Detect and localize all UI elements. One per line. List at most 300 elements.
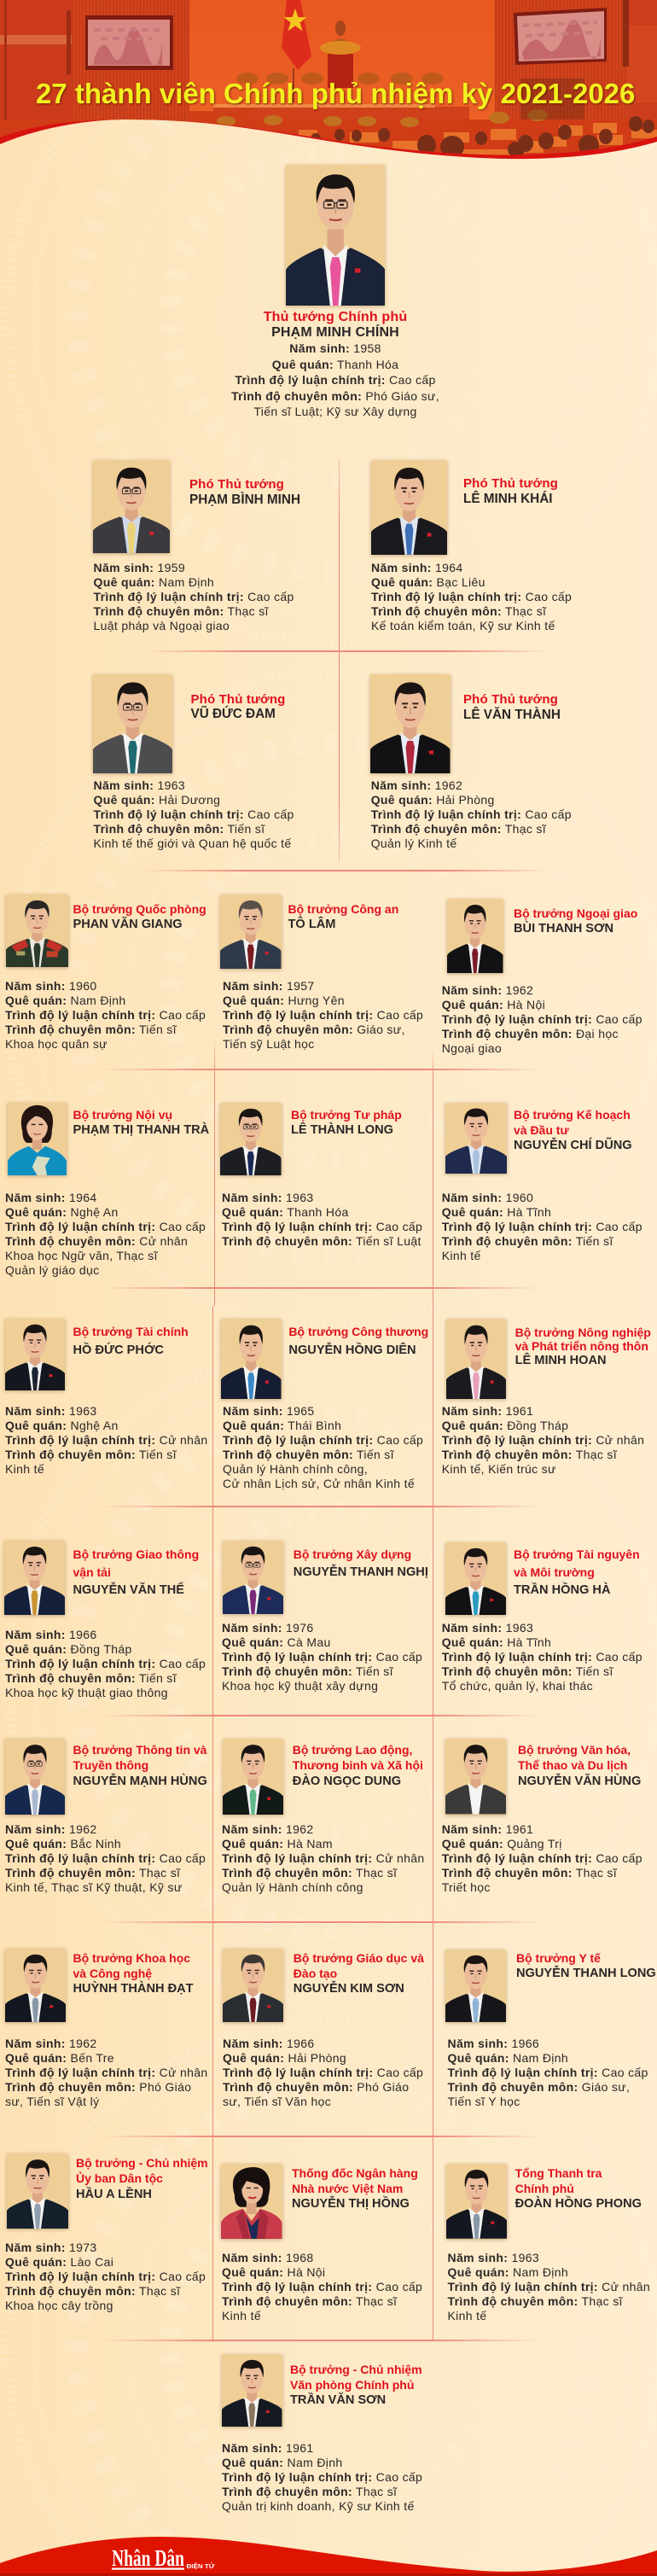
role and name: Bộ trưởng Kế hoạch — [514, 1108, 631, 1122]
role and name: NGUYỄN MẠNH HÙNG — [73, 1775, 207, 1788]
portrait: Hồ Đức Phớc — [5, 1319, 65, 1390]
role and name — [189, 477, 300, 507]
panel: Bộ trưởng Thông tin và Truyền thông Nguyễn Mạnh Hùng — [5, 1739, 212, 1897]
panel: Bộ trưởng - Chủ nhiệm Văn phòng Chính phủ Trần Văn Sơn — [222, 2354, 431, 2516]
role and name: Tổng Thanh tra — [515, 2166, 602, 2180]
role and name — [73, 1742, 207, 1789]
panel: Bộ trưởng Công an Tô Lâm — [218, 893, 423, 1051]
role and name: Bộ trưởng Xây dựng — [294, 1547, 411, 1561]
biography — [222, 1621, 422, 1693]
biography: Năm sinh: 1963 — [222, 1191, 313, 1204]
role and name — [518, 1742, 641, 1789]
panel: Bộ trưởng Quốc phòng Phan Văn Giang — [3, 893, 206, 1051]
biography: Trình độ lý luận chính trị: Cao cấp — [442, 1650, 642, 1664]
biography: Quê quán: Nghệ An — [5, 1419, 119, 1432]
role and name: Truyền thông — [73, 1758, 148, 1772]
biography: Trình độ chuyên môn: Tiến sĩ — [223, 1448, 394, 1461]
role and name: Bộ trưởng - Chủ nhiệm — [290, 2363, 422, 2376]
role and name: ĐÀO NGỌC DUNG — [293, 1775, 401, 1788]
role and name: Bộ trưởng - Chủ nhiệm — [76, 2156, 208, 2170]
biography: Trình độ lý luận chính trị: Cử nhân — [447, 2280, 650, 2293]
biography: Triết học — [442, 1880, 491, 1894]
biography: Trình độ lý luận chính trị: Cao cấp — [94, 807, 294, 821]
portrait: Hầu A Lềnh — [7, 2153, 68, 2229]
biography: Năm sinh: 1963 — [5, 1404, 96, 1418]
role and name: LÊ MINH HOAN — [515, 1354, 607, 1367]
biography: Trình độ chuyên môn: Tiến sĩ — [442, 1234, 613, 1248]
biography — [442, 983, 642, 1055]
role and name — [73, 1325, 189, 1357]
portrait: Nguyễn Văn Hùng — [445, 1739, 506, 1815]
biography: Năm sinh: 1958 — [289, 341, 381, 355]
biography: Trình độ lý luận chính trị: Cao cấp — [222, 2280, 422, 2293]
role and name — [73, 902, 206, 931]
title: 27 thành viên Chính phủ nhiệm kỳ 2021-2026 — [36, 78, 635, 109]
role and name: Bộ trưởng Tài chính — [73, 1325, 189, 1338]
role and name — [514, 1108, 632, 1152]
panel: Phó Thủ tướng Lê Minh Khái — [369, 459, 572, 632]
biography: Khoa học Ngữ văn, Thạc sĩ — [5, 1249, 158, 1262]
biography: Quê quán: Hưng Yên — [223, 994, 345, 1007]
biography: Trình độ chuyên môn: Đại học — [442, 1027, 619, 1040]
role and name — [294, 1950, 424, 1996]
panel: Bộ trưởng Lao động, Thương binh và Xã hội Đào Ngọc Dung — [222, 1739, 431, 1897]
biography: Kinh tế — [5, 1462, 44, 1476]
biography — [5, 979, 206, 1051]
biography: Khoa học quân sự — [5, 1037, 108, 1051]
biography — [222, 2251, 422, 2323]
role and name: vận tải — [73, 1565, 111, 1579]
biography: Quê quán: Nam Định — [5, 994, 125, 1007]
biography — [442, 1191, 642, 1262]
role and name: Văn phòng Chính phủ — [290, 2378, 414, 2392]
panel: Bộ trưởng Xây dựng Nguyễn Thanh Nghị — [222, 1541, 431, 1694]
biography: Trình độ chuyên môn: Thạc sĩ — [442, 1866, 617, 1880]
biography: Năm sinh: 1964 — [371, 560, 462, 574]
portrait: Nguyễn Thanh Long — [445, 1949, 506, 2022]
portrait: Bùi Thanh Sơn — [447, 899, 503, 973]
biography: Quản lý Hành chính công, — [223, 1462, 368, 1476]
role and name: HẦU A LỀNH — [76, 2188, 152, 2201]
biography: Quê quán: Đồng Tháp — [5, 1642, 132, 1656]
biography: Trình độ chuyên môn: Thạc sĩ — [222, 2485, 397, 2498]
role and name: TRẦN VĂN SƠN — [290, 2393, 386, 2407]
biography: Luật pháp và Ngoại giao — [94, 618, 230, 632]
role and name: Bộ trưởng Tài nguyên — [514, 1547, 640, 1561]
biography: Năm sinh: 1962 — [371, 778, 462, 792]
role and name — [288, 1325, 428, 1357]
biography: Trình độ chuyên môn: Tiến sĩ — [222, 1664, 393, 1678]
biography: Khoa học kỹ thuật giao thông — [5, 1685, 168, 1699]
role and name: ĐOÀN HỒNG PHONG — [515, 2197, 642, 2211]
role and name: HỒ ĐỨC PHỚC — [73, 1343, 164, 1357]
biography: Năm sinh: 1973 — [5, 2241, 96, 2254]
role and name: NGUYỄN CHÍ DŨNG — [514, 1139, 632, 1152]
biography: Năm sinh: 1966 — [447, 2037, 539, 2050]
biography: Trình độ lý luận chính trị: Cao cấp — [223, 2066, 423, 2079]
portrait: Lê Văn Thành — [370, 674, 451, 773]
role and name: HUỲNH THÀNH ĐẠT — [73, 1982, 194, 1996]
portrait: Trần Hồng Hà — [445, 1542, 506, 1615]
biography: Trình độ chuyên môn: Phó Giáo sư, — [231, 389, 439, 403]
biography: Tổ chức, quản lý, khai thác — [442, 1679, 593, 1693]
biography: Trình độ lý luận chính trị: Cao cấp — [94, 589, 294, 603]
panel: Bộ trưởng - Chủ nhiệm Ủy ban Dân tộc Hầu A Lềnh — [5, 2153, 212, 2316]
biography: Trình độ lý luận chính trị: Cao cấp — [5, 1220, 206, 1233]
biography: Trình độ lý luận chính trị: Cao cấp — [442, 1012, 642, 1026]
role and name: TÔ LÂM — [288, 918, 335, 931]
header: National Assembly hall banner — [0, 0, 657, 159]
biography: Trình độ lý luận chính trị: Cử nhân — [222, 1851, 425, 1865]
biography: Năm sinh: 1964 — [5, 1191, 96, 1204]
biography: Trình độ lý luận chính trị: Cao cấp — [5, 1851, 206, 1865]
role and name: LÊ THÀNH LONG — [291, 1123, 393, 1137]
biography: Trình độ chuyên môn: Phó Giáo — [5, 2080, 191, 2094]
biography: Quê quán: Bến Tre — [5, 2051, 114, 2065]
biography: Quê quán: Quảng Trị — [442, 1837, 562, 1850]
role and name: và Đầu tư — [514, 1123, 569, 1137]
biography: sư, Tiến sĩ Văn học — [223, 2095, 331, 2108]
biography — [222, 1822, 425, 1895]
biography — [222, 2441, 422, 2514]
biography: Trình độ lý luận chính trị: Cao cấp — [222, 1650, 422, 1664]
biography: Khoa học cây trồng — [5, 2299, 113, 2312]
biography: sư, Tiến sĩ Vật lý — [5, 2095, 99, 2108]
role and name: Bộ trưởng Tư pháp — [291, 1108, 402, 1122]
role and name — [293, 1742, 423, 1789]
biography: Trình độ chuyên môn: Tiến sĩ Luật — [222, 1234, 422, 1248]
panel: Bộ trưởng Nông nghiệp và Phát triển nông thôn Lê Minh Hoan — [442, 1318, 651, 1476]
role and name: Bộ trưởng Nông nghiệp — [515, 1326, 651, 1339]
biography: Năm sinh: 1963 — [447, 2251, 539, 2264]
biography: Tiến sỹ Luật học — [223, 1037, 315, 1051]
biography: Trình độ lý luận chính trị: Cao cấp — [371, 589, 572, 603]
role and name — [263, 310, 407, 340]
biography: Trình độ lý luận chính trị: Cao cấp — [5, 1656, 206, 1670]
biography: Trình độ lý luận chính trị: Cao cấp — [223, 1433, 423, 1447]
biography: Trình độ chuyên môn: Thạc sĩ — [371, 821, 546, 835]
panel: Bộ trưởng Nội vụ Phạm Thị Thanh Trà — [5, 1101, 209, 1277]
portrait: Phạm Thị Thanh Trà — [8, 1103, 67, 1175]
biography: Kinh tế thế giới và Quan hệ quốc tế — [94, 836, 292, 850]
role and name: PHẠM MINH CHÍNH — [271, 325, 399, 340]
biography: Quê quán: Cà Mau — [222, 1635, 331, 1649]
role and name: Bộ trưởng Công an — [288, 902, 398, 916]
biography — [231, 341, 439, 418]
biography: Năm sinh: 1962 — [222, 1822, 313, 1836]
role and name: BÙI THANH SƠN — [514, 922, 613, 935]
biography: Quê quán: Hải Phòng — [371, 792, 495, 806]
role and name: Bộ trưởng Công thương — [288, 1325, 428, 1338]
biography: Trình độ lý luận chính trị: Cao cấp — [235, 373, 436, 387]
biography: Trình độ chuyên môn: Tiến sĩ — [5, 1448, 177, 1461]
biography: Năm sinh: 1959 — [94, 560, 185, 574]
biography: Quê quán: Hải Phòng — [223, 2051, 346, 2065]
biography: Trình độ lý luận chính trị: Cao cấp — [223, 1008, 423, 1022]
role and name — [76, 2155, 208, 2202]
biography: Năm sinh: 1957 — [223, 979, 314, 993]
biography: Quê quán: Nam Định — [447, 2265, 568, 2279]
role and name — [516, 1950, 656, 1981]
panel: Phó Thủ tướng Phạm Bình Minh — [90, 459, 300, 632]
biography: Năm sinh: 1962 — [5, 2037, 96, 2050]
biography: Quản lý giáo dục — [5, 1263, 100, 1277]
biography — [222, 1191, 422, 1248]
role and name: Phó Thủ tướng — [189, 477, 284, 492]
panel: Bộ trưởng Công thương Nguyễn Hồng Diên — [218, 1318, 428, 1490]
role and name: PHẠM THỊ THANH TRÀ — [73, 1123, 209, 1137]
portrait: Tô Lâm — [220, 895, 282, 969]
biography: Trình độ chuyên môn: Thạc sĩ — [447, 2294, 623, 2308]
panel: Bộ trưởng Y tế Nguyễn Thanh Long — [445, 1949, 654, 2111]
role and name: PHẠM BÌNH MINH — [189, 492, 300, 507]
biography: Quê quán: Lào Cai — [5, 2255, 113, 2269]
role and name: Thống đốc Ngân hàng — [292, 2166, 418, 2180]
biography: Trình độ chuyên môn: Cử nhân — [5, 1234, 188, 1248]
biography: Trình độ lý luận chính trị: Cao cấp — [442, 1851, 642, 1865]
portrait: Nguyễn Kim Sơn — [223, 1949, 283, 2022]
biography: Quản trị kinh doanh, Kỹ sư Kinh tế — [222, 2499, 415, 2513]
biography — [5, 1404, 208, 1476]
biography: Quê quán: Nam Định — [447, 2051, 568, 2065]
biography: Trình độ lý luận chính trị: Cao cấp — [222, 1220, 422, 1233]
role and name: LÊ VĂN THÀNH — [463, 708, 561, 722]
biography: Trình độ chuyên môn: Tiến sĩ — [5, 1671, 177, 1685]
role and name: Bộ trưởng Y tế — [516, 1951, 601, 1965]
biography: Trình độ lý luận chính trị: Cử nhân — [5, 1433, 208, 1447]
role and name — [292, 2165, 418, 2212]
biography: Năm sinh: 1963 — [442, 1621, 533, 1635]
role and name: NGUYỄN VĂN HÙNG — [518, 1775, 641, 1788]
biography — [94, 560, 294, 632]
role and name: và Công nghệ — [73, 1967, 152, 1980]
role and name: PHAN VĂN GIANG — [73, 918, 183, 931]
biography: Trình độ lý luận chính trị: Cao cấp — [5, 2270, 206, 2283]
role and name: Nhà nước Việt Nam — [292, 2182, 403, 2195]
portrait: Đào Ngọc Dung — [223, 1739, 283, 1815]
panel: Bộ trưởng Giao thông vận tải Nguyễn Văn Thể — [4, 1541, 212, 1701]
role and name: Bộ trưởng Lao động, — [293, 1743, 412, 1757]
biography: Quê quán: Hà Tĩnh — [442, 1635, 551, 1649]
role and name: Bộ trưởng Ngoại giao — [514, 906, 637, 920]
biography: Quê quán: Hải Dương — [94, 792, 220, 806]
portrait: Vũ Đức Đam — [93, 674, 172, 773]
biography: Trình độ chuyên môn: Tiến sĩ — [94, 821, 265, 835]
role and name: và Môi trường — [514, 1565, 595, 1579]
biography: Trình độ lý luận chính trị: Cử nhân — [5, 2066, 208, 2079]
role and name: Phó Thủ tướng — [463, 476, 558, 491]
portrait: Phạm Minh Chính — [285, 165, 385, 306]
biography: Trình độ chuyên môn: Thạc sĩ — [442, 1448, 617, 1461]
biography — [223, 979, 423, 1051]
biography: Quản lý Hành chính công — [222, 1880, 363, 1894]
biography: Kế toán kiểm toán, Kỹ sư Kinh tế — [371, 618, 555, 632]
footer: red wave with Nhân Dân logo: ĐIỆN TỬ — [186, 2562, 215, 2570]
biography: Kinh tế — [222, 2309, 261, 2322]
role and name — [514, 1546, 640, 1600]
biography: Quê quán: Nghệ An — [5, 1205, 119, 1219]
biography: Trình độ lý luận chính trị: Cao cấp — [222, 2470, 422, 2484]
biography: Năm sinh: 1965 — [223, 1404, 314, 1418]
role and name — [73, 1546, 199, 1600]
biography: Trình độ lý luận chính trị: Cử nhân — [442, 1433, 644, 1447]
biography: Năm sinh: 1961 — [442, 1404, 533, 1418]
biography: Quê quán: Hà Nội — [222, 2265, 325, 2279]
biography: Năm sinh: 1960 — [5, 979, 96, 993]
biography: Trình độ chuyên môn: Phó Giáo — [223, 2080, 409, 2094]
portrait: Nguyễn Văn Thể — [4, 1541, 65, 1615]
role and name: Đào tạo — [294, 1967, 337, 1980]
biography: Trình độ chuyên môn: Giáo sư, — [223, 1023, 405, 1036]
biography: Quê quán: Bạc Liêu — [371, 575, 485, 589]
portrait: Nguyễn Chí Dũng — [445, 1103, 507, 1174]
biography: Quê quán: Đồng Tháp — [442, 1419, 568, 1432]
panel: Bộ trưởng Văn hóa, Thể thao và Du lịch Nguyễn Văn Hùng — [442, 1739, 655, 1897]
biography: Trình độ chuyên môn: Tiến sĩ — [5, 1023, 177, 1036]
panel: Bộ trưởng Tư pháp Lê Thành Long — [218, 1101, 422, 1248]
role and name: Phó Thủ tướng — [463, 692, 558, 707]
biography: Quê quán: Nam Định — [222, 2456, 342, 2469]
biography: Trình độ lý luận chính trị: Cao cấp — [442, 1220, 642, 1233]
biography — [5, 1627, 206, 1700]
role and name: NGUYỄN THANH LONG — [516, 1967, 656, 1980]
biography: Năm sinh: 1966 — [5, 1627, 96, 1641]
biography: Năm sinh: 1960 — [442, 1191, 533, 1204]
portrait: Phạm Bình Minh — [93, 460, 170, 553]
biography: Năm sinh: 1968 — [222, 2251, 313, 2264]
biography: Quê quán: Hà Nam — [222, 1837, 333, 1850]
role and name — [514, 906, 637, 935]
panel: Thống đốc Ngân hàng Nhà nước Việt Nam Nguyễn Thị Hồng — [221, 2164, 431, 2326]
portrait: Lê Thành Long — [220, 1103, 282, 1175]
biography: Năm sinh: 1966 — [223, 2037, 314, 2050]
role and name — [515, 1326, 651, 1367]
biography: Quê quán: Thanh Hóa — [272, 358, 398, 371]
role and name: VŨ ĐỨC ĐAM — [191, 707, 276, 721]
biography: Quản lý Kinh tế — [371, 836, 457, 850]
panel: Bộ trưởng Khoa học và Công nghệ Huỳnh Thành Đạt — [5, 1949, 212, 2111]
panel: Bộ trưởng Giáo dục và Đào tạo Nguyễn Kim Sơn — [223, 1949, 431, 2111]
role and name — [463, 692, 561, 722]
biography: Năm sinh: 1963 — [94, 778, 185, 792]
role and name — [463, 476, 558, 506]
biography: Tiến sĩ Y học — [447, 2095, 520, 2108]
role and name: NGUYỄN THANH NGHỊ — [294, 1565, 428, 1579]
portrait: Trần Văn Sơn — [222, 2354, 282, 2427]
footer: red wave with Nhân Dân logo — [0, 2526, 657, 2576]
biography: Tiến sĩ Luật; Kỹ sư Xây dựng — [253, 405, 417, 418]
biography: Kinh tế, Thạc sĩ Kỹ thuật, Kỹ sư — [5, 1880, 183, 1894]
portrait: Đoàn Hồng Phong — [446, 2164, 507, 2239]
biography: Kinh tế, Kiến trúc sư — [442, 1462, 556, 1476]
biography: Quê quán: Nam Định — [94, 575, 214, 589]
role and name: NGUYỄN HỒNG DIÊN — [288, 1343, 416, 1357]
portrait: Nguyễn Mạnh Hùng — [5, 1739, 65, 1815]
biography: Ngoại giao — [442, 1041, 502, 1055]
biography: Trình độ chuyên môn: Thạc sĩ — [371, 604, 546, 618]
portrait: Huỳnh Thành Đạt — [5, 1949, 66, 2022]
panel: Tổng Thanh tra Chính phủ Đoàn Hồng Phong — [446, 2164, 654, 2326]
role and name: NGUYỄN VĂN THỂ — [73, 1583, 184, 1597]
biography — [223, 1404, 423, 1490]
portrait: Nguyễn Thanh Nghị — [223, 1541, 283, 1614]
biography: Trình độ lý luận chính trị: Cao cấp — [371, 807, 572, 821]
role and name — [290, 2362, 422, 2409]
biography — [442, 1404, 644, 1477]
role and name — [73, 1108, 209, 1137]
portrait: Phan Văn Giang, military uniform — [6, 895, 68, 967]
role and name — [294, 1546, 428, 1582]
portrait: Lê Minh Hoan — [446, 1319, 506, 1399]
biography: Quê quán: Thanh Hóa — [222, 1205, 349, 1219]
biography: Kinh tế — [442, 1249, 481, 1262]
biography — [5, 2037, 208, 2109]
biography: Trình độ lý luận chính trị: Cao cấp — [447, 2066, 648, 2079]
biography: Trình độ chuyên môn: Thạc sĩ — [94, 604, 269, 618]
panel: Bộ trưởng Ngoại giao Bùi Thanh Sơn — [442, 897, 642, 1055]
panel: Bộ trưởng Kế hoạch và Đầu tư Nguyễn Chí Dũng — [442, 1101, 642, 1262]
biography: Trình độ chuyên môn: Giáo sư, — [447, 2080, 630, 2094]
biography — [371, 560, 572, 632]
role and name: Bộ trưởng Giao thông — [73, 1547, 199, 1561]
biography — [5, 1191, 206, 1277]
biography — [5, 1822, 206, 1895]
role and name: Chính phủ — [515, 2182, 574, 2195]
panel: Thủ tướng Phạm Minh Chính — [231, 164, 439, 418]
biography: Năm sinh: 1961 — [222, 2441, 313, 2455]
biography — [94, 778, 294, 850]
biography — [447, 2037, 648, 2109]
biography: Trình độ chuyên môn: Tiến sĩ — [442, 1664, 613, 1678]
role and name — [191, 691, 285, 721]
role and name — [291, 1108, 402, 1137]
biography: Khoa học kỹ thuật xây dựng — [222, 1679, 378, 1693]
role and name: Bộ trưởng Nội vụ — [73, 1108, 172, 1122]
role and name: NGUYỄN THỊ HỒNG — [292, 2197, 410, 2211]
role and name: TRẦN HỒNG HÀ — [514, 1583, 611, 1597]
role and name: và Phát triển nông thôn — [515, 1339, 648, 1353]
biography: Năm sinh: 1962 — [442, 983, 533, 997]
role and name: Thủ tướng Chính phủ — [264, 310, 407, 324]
biography: Năm sinh: 1962 — [5, 1822, 96, 1836]
role and name — [288, 902, 398, 931]
biography: Trình độ chuyên môn: Thạc sĩ — [222, 2294, 397, 2308]
role and name: Bộ trưởng Quốc phòng — [73, 902, 206, 916]
role and name: Bộ trưởng Khoa học — [73, 1951, 190, 1965]
biography — [370, 778, 572, 850]
role and name: Phó Thủ tướng — [191, 691, 285, 707]
biography: Năm sinh: 1961 — [442, 1822, 533, 1836]
role and name: Thương binh và Xã hội — [293, 1758, 423, 1772]
biography: Trình độ chuyên môn: Thạc sĩ — [5, 2284, 180, 2298]
biography — [442, 1621, 642, 1693]
role and name: Ủy ban Dân tộc — [76, 2171, 163, 2185]
biography: Năm sinh: 1976 — [222, 1621, 313, 1635]
portrait: Lê Minh Khái — [371, 460, 447, 555]
biography — [442, 1822, 642, 1895]
footer: red wave with Nhân Dân logo: Nhân Dân — [112, 2545, 184, 2571]
biography: Kinh tế — [447, 2309, 486, 2322]
panel: Bộ trưởng Tài nguyên và Môi trường Trần Hồng Hà — [442, 1541, 655, 1694]
role and name — [515, 2165, 642, 2212]
role and name: Bộ trưởng Thông tin và — [73, 1743, 206, 1757]
biography — [447, 2251, 650, 2323]
biography: Trình độ chuyên môn: Thạc sĩ — [222, 1866, 397, 1880]
biography: Quê quán: Hà Nội — [442, 998, 545, 1011]
role and name: NGUYỄN KIM SƠN — [294, 1982, 404, 1996]
portrait: Nguyễn Hồng Diên — [221, 1319, 282, 1399]
biography: Trình độ lý luận chính trị: Cao cấp — [5, 1008, 206, 1022]
